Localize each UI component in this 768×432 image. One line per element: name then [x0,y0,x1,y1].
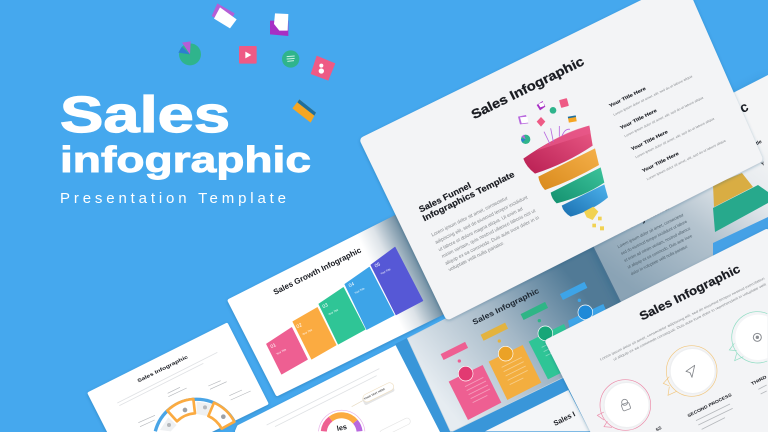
text items: Title [751,139,763,149]
copy lines [617,212,693,276]
slide panel [548,232,767,430]
floating icons [178,3,335,123]
label: second process: SECOND PROCESS [687,392,732,418]
slide panel [89,325,267,431]
card 03 [319,288,365,344]
funnel tier: orange [538,148,599,190]
slide panel [230,216,445,394]
coins [584,207,604,230]
title: Sales Infographic [469,53,586,122]
copy lines: et enim ad minim veniam, nostrud ullamco [623,226,692,263]
circle: target [729,312,767,363]
list item 3: Lorem ipsum dolor sit amet, elit, sed do ut labore aliqua [635,117,715,159]
slide: pyramid [561,75,768,310]
list item 4: Your Title Here [641,151,680,173]
title: Sales Infographic [637,261,743,323]
tile pink [441,342,501,420]
slide panel [365,1,758,315]
left paragraph: Lorem ipsum dolor sit amet, consectetur [431,195,509,238]
left paragraph: aliquip ex ea commodo. Duis aute irure dolor in in [444,215,541,267]
card 02: 02 [296,322,303,330]
headline: Sales infographic [60,86,311,207]
icon: envelope [270,13,288,36]
card 05: Your Title [380,267,392,276]
funnel tier: red [523,126,593,174]
funnel tier: blue [562,184,608,217]
card 04: 04 [348,281,356,289]
callout top: YOUR TEXT HERE [363,387,386,401]
purple sparks [544,126,570,144]
list item 2: Lorem ipsum dolor sit amet, elit, sed do ut labore aliqua [624,96,704,138]
icon: green list [282,50,299,68]
left heading: Infographics Template [421,169,516,223]
circle: paper plane [663,346,717,396]
card 05: 05 [374,262,382,269]
icon: play button [239,46,257,64]
icon: pink square [559,98,569,108]
label: third process [750,374,767,394]
icon: pink diamond [537,117,545,127]
copy lines: ut aliquip ex ea commodo. Duis aute irure [627,233,693,270]
icon: pie chart [178,41,201,65]
slide: numbered process [407,240,653,431]
list item 1: Your Title Here [608,86,647,108]
icon: credit card [292,99,316,123]
copy lines: dolor in voluptate velit nulla pariatur. [630,244,689,276]
card 03: 03 [322,302,329,310]
icon: green dot [550,107,556,114]
word: infographic: infographic [60,139,311,180]
list item 1: Lorem ipsum dolor sit amet, elit, sed do ut labore aliqua [613,74,693,117]
slide: process circles [548,232,767,432]
slide panel [407,240,653,431]
slide: main sales funnel [365,1,758,315]
heading under main slide: Sales Pyramid [608,201,670,239]
left paragraph [431,195,541,273]
card 01: 01 [270,342,277,350]
tile green [521,302,580,379]
icon: chat card [212,3,237,28]
pyramid tier: yellow [713,173,753,207]
icon: envelope [537,101,545,110]
title: Sales Infographic [137,354,189,384]
list item 3: Your Title Here [630,129,669,152]
slide: sales growth [230,216,445,394]
donut chart [318,410,365,432]
funnel tier: green [551,167,604,203]
list item 2: Your Title Here [619,108,658,130]
slide panel [485,390,590,431]
card 04: Your Title [354,286,366,295]
dark blue band behind slides [395,232,768,432]
description: ut aliquip ex ea commodo consequat. Duis aute irure dolor in reprehenderit in voluptate velit [613,282,767,362]
left heading: Sales Funnel [417,180,473,214]
icon: pink card [311,56,335,81]
card 01 [267,328,307,374]
icon: chat [518,115,528,124]
ring diagram [155,399,238,431]
right list [608,74,726,181]
pyramid slide text block [617,212,693,276]
slide: bottom partial [485,390,590,431]
slide: circular sales infographic [89,325,267,431]
title: Sales Infographic [471,286,541,327]
pyramid tier: blue [713,217,768,259]
label: second process [687,392,733,429]
list item 4: Lorem ipsum dolor sit amet, elit, sed do ut labore aliqua [646,139,726,181]
copy lines: sed do eiusmod tempor incididunt ut labore [620,219,688,256]
tile orange [481,323,541,400]
label: third process: THIRD [750,374,767,386]
left paragraph: voluptate velit nulla pariatur. [448,240,505,273]
copy lines: Lorem ipsum dolor sit amet, consectetur [617,212,685,249]
left paragraph: ut labore et dolore magna aliqua. Ut enim ad [438,206,524,253]
callout right [379,417,411,432]
funnel chart [523,126,608,230]
slide panel [561,75,768,310]
circle: lock [597,380,651,430]
card 02 [293,308,336,359]
card 05 [371,247,423,315]
slide: pyramid: Y [760,161,766,168]
description lines [117,352,217,406]
description: Lorem ipsum dolor sit amet, consectetur adipiscing elit, sed do eiusmod tempor nostrud exercitation [599,276,765,362]
icon: pie [521,135,530,144]
icon: card [568,115,577,123]
funnel icons [518,98,577,144]
tile blue [560,282,613,347]
card 04 [345,267,394,329]
description lines [267,369,379,427]
left paragraph: adipiscing elit, sed do eiusmod tempor incididunt [434,195,529,246]
pyramid tier: green [713,185,768,232]
card 03: Your Title [327,308,339,316]
slide panel [237,347,440,431]
subtitle: Presentation Template [60,190,286,207]
card 02: Your Title [301,328,313,336]
left paragraph: minim veniam, quis nostrud ullamco laboris nisi ut [441,208,537,260]
slide: donut sales [237,347,440,432]
title: Sales I [552,409,577,428]
word: Sales: Sales [60,86,230,143]
card 01: Your Title [275,347,287,356]
heading fragment: ic [733,98,751,118]
title: Sales Growth Infographic [272,245,363,297]
callout top [352,381,395,407]
column labels [138,381,251,427]
